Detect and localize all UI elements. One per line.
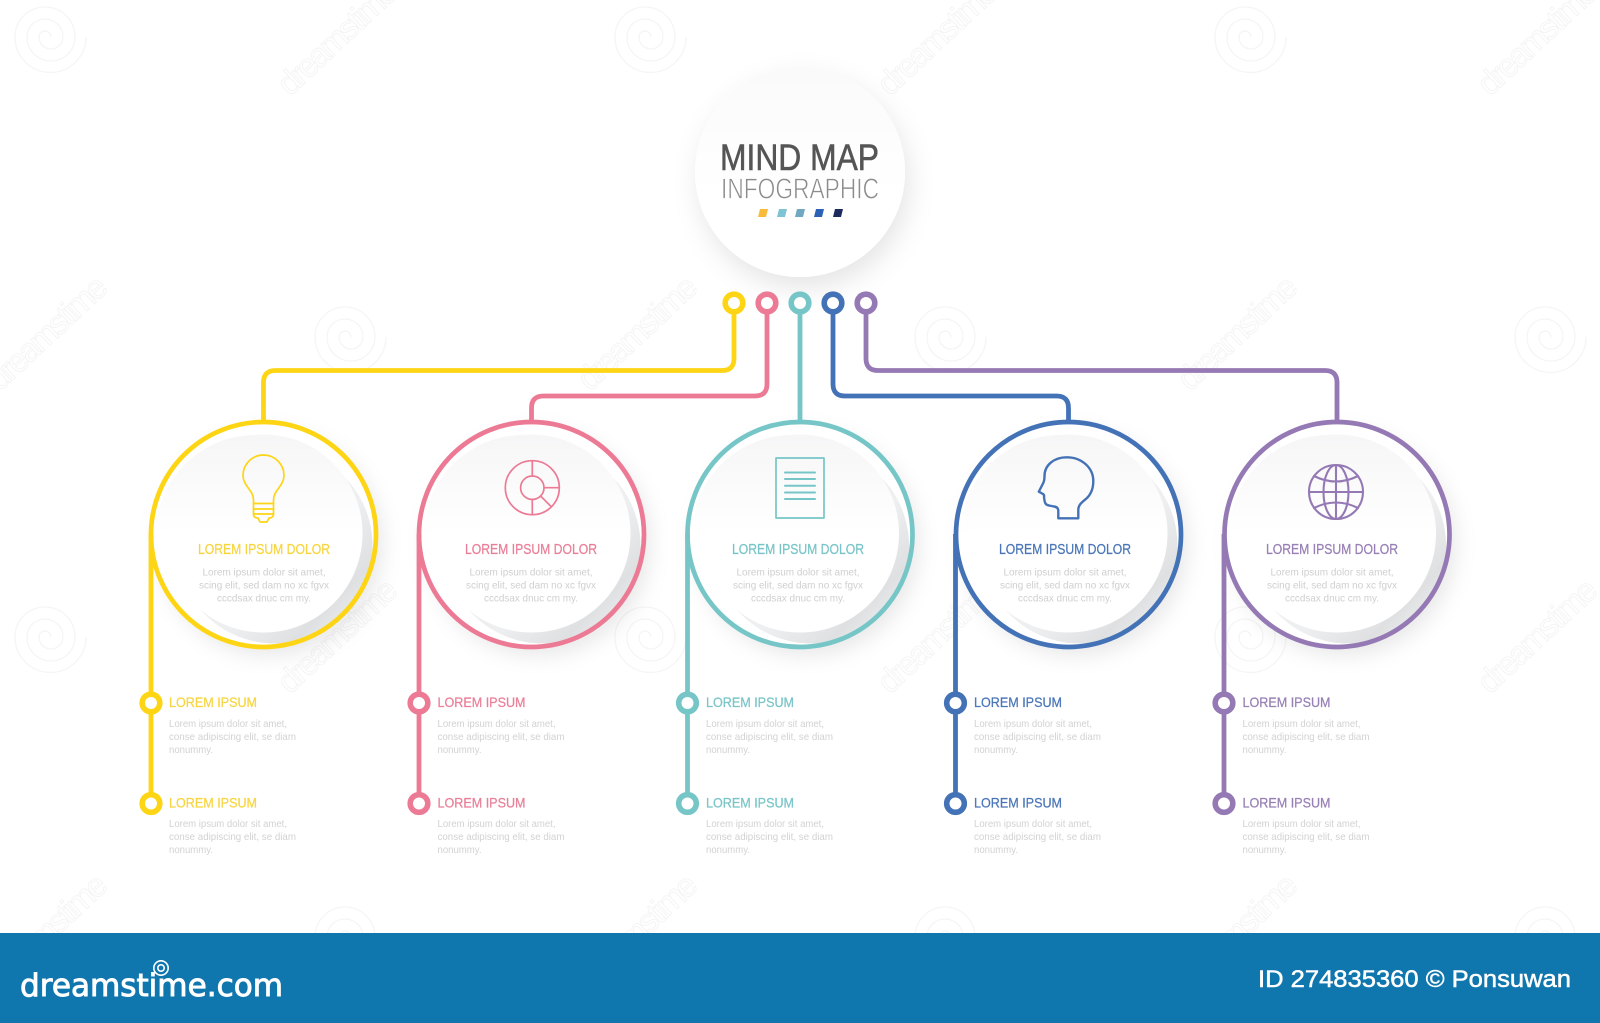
watermark pattern: dreamstime (570, 268, 704, 397)
list item 2: nonummy. (169, 844, 213, 856)
connector dot (758, 294, 776, 312)
icon: logo spiral (154, 961, 168, 975)
list item 1: conse adipiscing elit, se diam (169, 731, 296, 743)
timeline line (685, 534, 690, 803)
watermark pattern: dreamstime (270, 571, 404, 700)
connector (532, 312, 767, 422)
title: mind map: MIND MAP (720, 137, 879, 178)
ring (151, 422, 376, 647)
watermark pattern: dreamstime (1170, 268, 1304, 397)
list item 1: nonummy. (974, 744, 1018, 756)
card body: Lorem ipsum dolor sit amet, (202, 566, 326, 578)
list item 2: nonummy. (438, 844, 482, 856)
list item 1: LOREM IPSUM (1242, 694, 1330, 710)
list item 2: Lorem ipsum dolor sit amet, (169, 818, 287, 830)
colour swatches (758, 209, 843, 217)
list item 1: conse adipiscing elit, se diam (706, 731, 833, 743)
list item 1: conse adipiscing elit, se diam (974, 731, 1101, 743)
list item 1: Lorem ipsum dolor sit amet, (1242, 718, 1360, 730)
icon: pie chart (505, 461, 559, 515)
ring (956, 422, 1181, 647)
card shadow and shading (152, 422, 376, 646)
card body (1267, 566, 1398, 604)
ring (688, 422, 912, 647)
branch 3: teal (679, 294, 912, 856)
connector dot (791, 294, 809, 312)
timeline line (1222, 534, 1226, 803)
branch 1: yellow (142, 294, 743, 856)
list item 2: conse adipiscing elit, se diam (706, 831, 833, 843)
list item 1: Lorem ipsum dolor sit amet, (706, 718, 824, 730)
watermark pattern: dreamstime (1170, 866, 1304, 995)
connector (264, 312, 734, 422)
list item 1: nonummy. (438, 744, 482, 756)
list item 1: conse adipiscing elit, se diam (438, 731, 565, 743)
icon: globe (1309, 465, 1363, 519)
list item 2: Lorem ipsum dolor sit amet, (1242, 818, 1360, 830)
connector (866, 312, 1337, 422)
list item 2: nonummy. (974, 844, 1018, 856)
list item 1 (410, 694, 565, 756)
list item 2: nonummy. (1242, 844, 1286, 856)
list item 1: conse adipiscing elit, se diam (1242, 731, 1370, 743)
card heading: LOREM IPSUM DOLOR (999, 542, 1131, 558)
watermark pattern: dreamstime (570, 866, 704, 995)
list item 2: conse adipiscing elit, se diam (1242, 831, 1370, 843)
card body: Lorem ipsum dolor sit amet, (1270, 566, 1394, 578)
card body: scing elit, sed dam no xc fgvx (1000, 580, 1131, 592)
card shadow and shading (1225, 422, 1449, 646)
list item 1: nonummy. (706, 744, 750, 756)
card body: Lorem ipsum dolor sit amet, (470, 566, 592, 578)
card body: cccdsax dnuc cm my. (217, 592, 311, 604)
timeline line (417, 534, 421, 803)
branch 2: pink (410, 294, 776, 856)
list item 2: conse adipiscing elit, se diam (438, 831, 565, 843)
ring (419, 422, 644, 647)
connector (798, 312, 802, 422)
card body: cccdsax dnuc cm my. (751, 592, 845, 604)
footer bar (0, 933, 1600, 1023)
card body: scing elit, sed dam no xc fgvx (733, 580, 864, 592)
list item 2 (1215, 794, 1370, 856)
list item 1 (679, 694, 833, 756)
connector dot (725, 294, 743, 312)
card heading: LOREM IPSUM DOLOR (1266, 542, 1398, 558)
connector dot (824, 294, 842, 312)
card body: cccdsax dnuc cm my. (484, 592, 578, 604)
list item 1 (142, 694, 296, 756)
list item 2: Lorem ipsum dolor sit amet, (438, 818, 556, 830)
footer credit: ID 274835360 © Ponsuwan (1258, 966, 1571, 993)
card shadow and shading (688, 422, 912, 646)
list item 2: LOREM IPSUM (706, 794, 794, 810)
list item 1: LOREM IPSUM (169, 694, 257, 710)
list item 1: Lorem ipsum dolor sit amet, (438, 718, 556, 730)
list item 2 (679, 794, 833, 856)
list item 1: nonummy. (169, 744, 213, 756)
card heading: LOREM IPSUM DOLOR (465, 542, 597, 558)
list item 2 (947, 794, 1101, 856)
list item 2: Lorem ipsum dolor sit amet, (974, 818, 1092, 830)
list item 1: Lorem ipsum dolor sit amet, (169, 718, 287, 730)
connector (833, 312, 1068, 422)
card body (733, 566, 864, 604)
card body (199, 566, 330, 604)
list item 1: Lorem ipsum dolor sit amet, (974, 718, 1092, 730)
card shadow and shading (420, 422, 644, 646)
list item 2: LOREM IPSUM (1242, 794, 1330, 810)
card shadow and shading (956, 422, 1180, 646)
card body: scing elit, sed dam no xc fgvx (199, 580, 330, 592)
card body (1000, 566, 1131, 604)
card body: Lorem ipsum dolor sit amet, (736, 566, 860, 578)
list item 2: Lorem ipsum dolor sit amet, (706, 818, 824, 830)
icon: document (776, 458, 824, 518)
list item 2: conse adipiscing elit, se diam (169, 831, 296, 843)
card body: scing elit, sed dam no xc fgvx (466, 580, 597, 592)
connector dot (857, 294, 875, 312)
list item 2: LOREM IPSUM (169, 794, 257, 810)
list item 2: conse adipiscing elit, se diam (974, 831, 1101, 843)
icon: light bulb (243, 455, 284, 522)
card body: scing elit, sed dam no xc fgvx (1267, 580, 1398, 592)
list item 1: LOREM IPSUM (974, 694, 1062, 710)
list item 1 (947, 694, 1101, 756)
list item 1 (1215, 694, 1370, 756)
timeline line (149, 534, 153, 803)
footer logo: dreamstime.com (20, 968, 283, 1004)
list item 2 (142, 794, 296, 856)
list item 2 (410, 794, 565, 856)
branch 4: blue (824, 294, 1181, 856)
card body: cccdsax dnuc cm my. (1285, 592, 1379, 604)
list item 2: nonummy. (706, 844, 750, 856)
list item 1: LOREM IPSUM (706, 694, 794, 710)
central title circle (695, 67, 905, 277)
timeline line (953, 534, 958, 803)
list item 1: LOREM IPSUM (438, 694, 526, 710)
icon: head (1039, 457, 1093, 518)
card body (466, 566, 597, 604)
list item 2: LOREM IPSUM (438, 794, 526, 810)
list item 1: nonummy. (1242, 744, 1286, 756)
ring (1224, 422, 1450, 647)
card body: Lorem ipsum dolor sit amet, (1004, 566, 1126, 578)
card body: cccdsax dnuc cm my. (1018, 592, 1112, 604)
subtitle: infographic: INFOGRAPHIC (721, 174, 879, 206)
list item 2: LOREM IPSUM (974, 794, 1062, 810)
card heading: LOREM IPSUM DOLOR (732, 542, 864, 558)
watermark pattern: dreamstime (870, 571, 1004, 700)
branch 5: purple (857, 294, 1450, 856)
card heading: LOREM IPSUM DOLOR (198, 542, 330, 558)
